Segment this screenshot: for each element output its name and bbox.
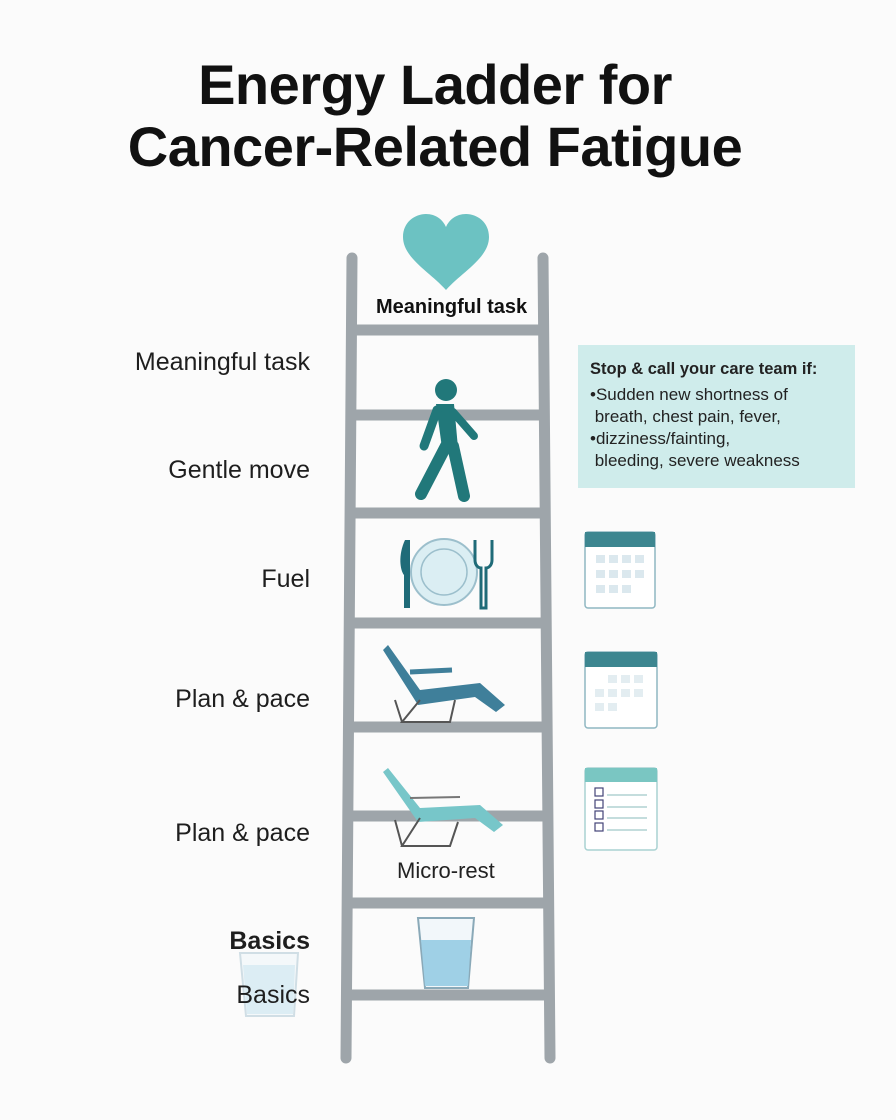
left labels: Meaningful task [135,348,310,376]
icon: calendar 1 [585,532,655,608]
callout: warning box [578,345,855,488]
text: Gentle move [168,456,310,484]
icon: plate and cutlery [400,539,492,608]
icon: glass small left [240,953,298,1016]
label: micro-rest: Micro-rest [397,858,495,883]
icon: recliner light [383,768,503,846]
icon: calendar 2 [585,652,657,728]
text: Fuel [261,565,310,593]
icon: recliner dark [383,645,505,722]
icon: walking person [421,379,474,496]
ladder label: top: Meaningful task [376,296,527,318]
icon: heart [403,214,489,290]
title: Cancer-Related Fatigue [128,115,742,178]
callout: warning box: bleeding, severe weakness [595,451,800,470]
callout: warning box: breath, chest pain, fever, [595,407,781,426]
title: Energy Ladder for [198,53,672,116]
title [128,53,742,178]
text: Plan & pace [175,819,310,847]
icon: glass of water [418,918,474,988]
icon: checklist [585,768,657,850]
callout: warning box: •Sudden new shortness of [590,385,788,404]
text: Plan & pace [175,685,310,713]
text: Basics [229,927,310,955]
text: Basics [236,981,310,1009]
callout: warning box: •dizziness/fainting, [590,429,730,448]
callout: warning box: Stop & call your care team if: [590,360,817,378]
